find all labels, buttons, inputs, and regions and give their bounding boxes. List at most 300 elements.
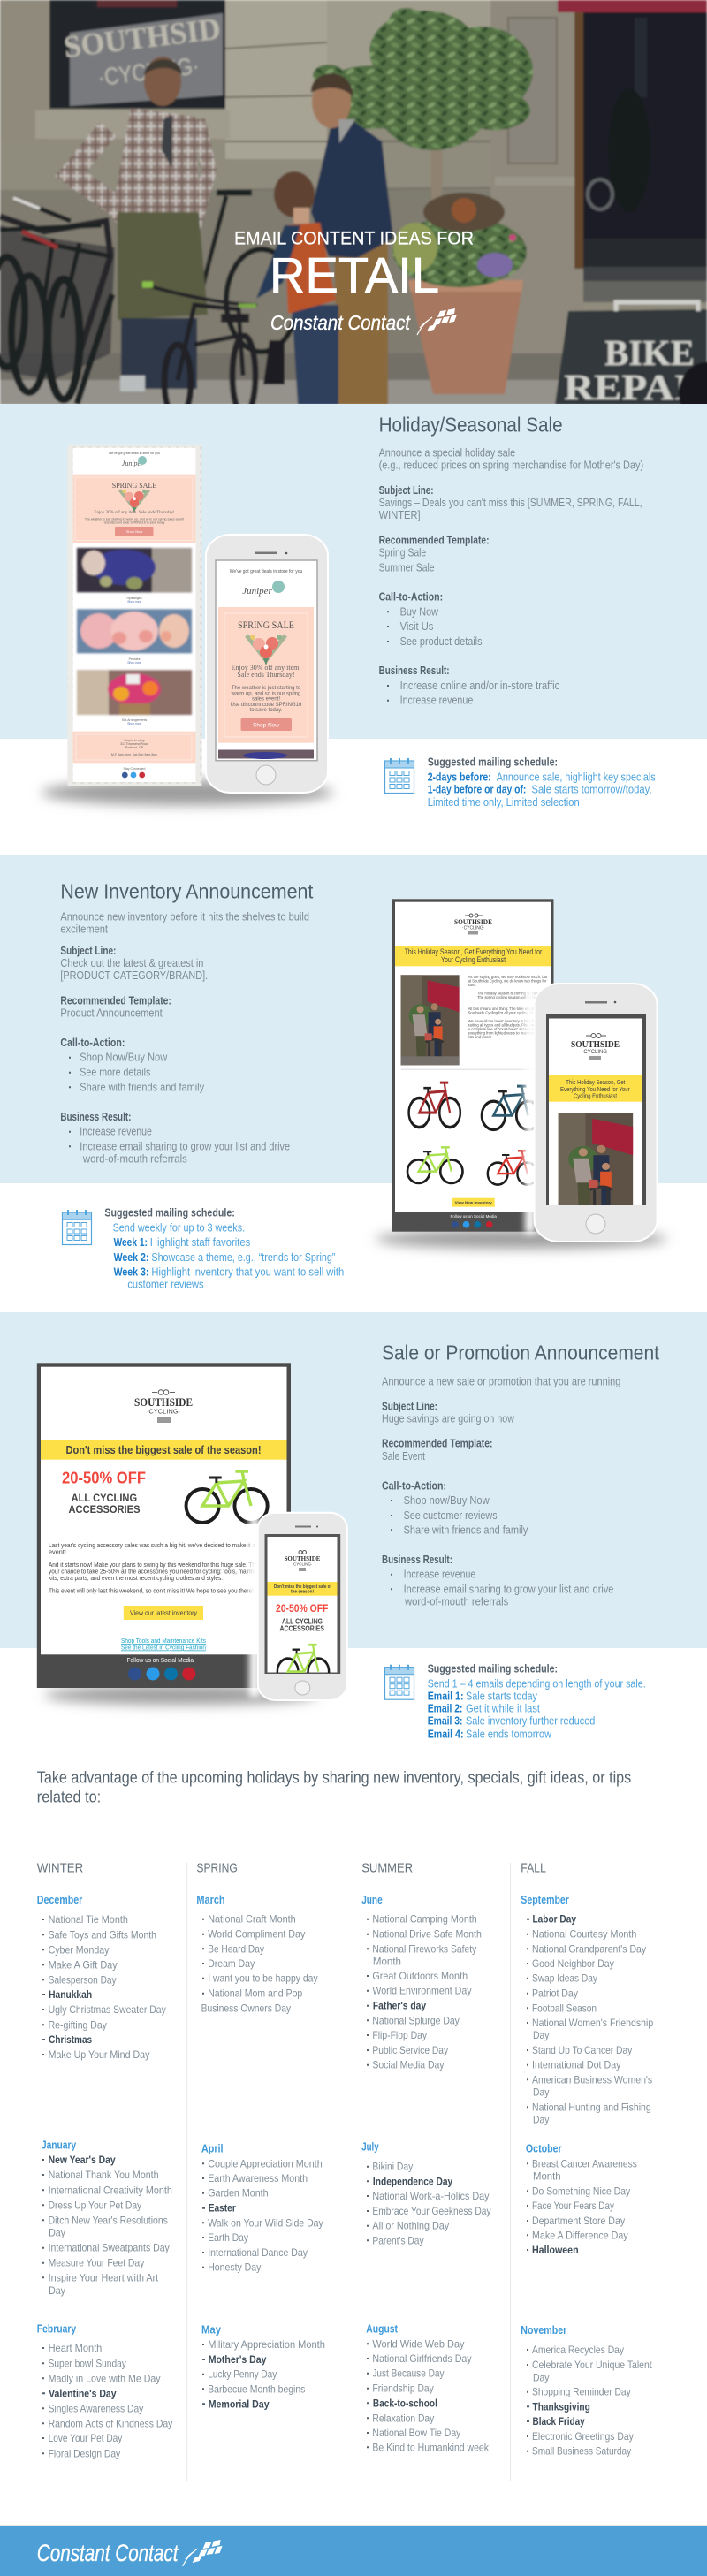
- email mockup: spring sale: 313 Townsend Road: [120, 742, 148, 746]
- boy in orange shirt: [256, 171, 338, 405]
- month list: february: Love Your Pet Day: [49, 2432, 122, 2444]
- email mockup: spring sale: Shop now: [127, 661, 141, 665]
- month list: december: [37, 1894, 166, 2061]
- email mockup: biggest sale of the season: View our latest inventory: [130, 1608, 197, 1617]
- month list: november: Shopping Reminder Day: [532, 2386, 631, 2398]
- month list: december: December: [37, 1894, 82, 1906]
- email mockup: biggest sale of the season: And it starts now! Make your plans to swing by this weekend for this huge sale. Th: [49, 1561, 255, 1569]
- month list: february: Valentine's Day: [49, 2387, 117, 2399]
- mailing schedule: inventory: Highlight inventory that you want to sell with: [151, 1266, 344, 1279]
- panel: sale or promotion announcement: [0, 1312, 707, 1741]
- mailing schedule: holiday sale: Limited time only, Limited selection: [428, 796, 580, 809]
- text block: holiday sale details: Announce a special holiday sale: [379, 447, 515, 460]
- text block: inventory details: Increase revenue: [80, 1126, 152, 1138]
- month list: august: World Wide Web Day: [372, 2337, 465, 2350]
- hero overline title: EMAIL CONTENT IDEAS FOR: [234, 228, 474, 249]
- month list: june: National Splurge Day: [372, 2014, 460, 2026]
- email mockup: biggest sale of the season: ·CYCLING·: [147, 1407, 180, 1416]
- email mockup: spring sale: Shop now: [127, 722, 141, 726]
- month list: july: National Work-a-Holics Day: [372, 2190, 490, 2202]
- month list: november: Celebrate Your Unique Talent: [532, 2359, 652, 2371]
- email mockup: southside cycling inventory: Your Cycling Enthusiast: [441, 955, 506, 964]
- text block: holiday sale details: Buy Now: [400, 605, 439, 618]
- text block: inventory details: [PRODUCT CATEGORY/BRAND].: [60, 969, 208, 982]
- text block: holiday sale details: Increase revenue: [400, 695, 473, 707]
- hero constant contact logo: Constant Contact: [270, 311, 411, 334]
- month list: april: Garden Month: [208, 2187, 269, 2200]
- email mockup: southside cycling inventory: a complete line of "must-have" accessories: [468, 1027, 538, 1031]
- text block: promotion details: Business Result:: [382, 1554, 452, 1566]
- text block: inventory details: word-of-mouth referrals: [82, 1152, 187, 1165]
- hero main title: RETAIL: [270, 247, 439, 304]
- phone mockup: biggest sale of the season: the season!: [291, 1589, 314, 1594]
- email mockup: biggest sale of the season: your chance to take 25-50% all the accessories you need for cycling: tools, mainte: [49, 1568, 255, 1575]
- month list: june: Month: [373, 1955, 401, 1967]
- email mockup: spring sale: Shop Now: [126, 529, 142, 534]
- phone mockup: spring sale: The weather is just starting to: [232, 686, 301, 691]
- shop doorway: [558, 0, 707, 302]
- month list: december: Salesperson Day: [49, 1973, 117, 1986]
- text block: inventory details: Business Result:: [60, 1111, 131, 1123]
- text block: inventory details: Increase email sharing to grow your list and drive: [80, 1140, 290, 1152]
- footer band with logo: Constant Contact: [37, 2540, 179, 2566]
- month list: june: National Drive Safe Month: [372, 1928, 482, 1941]
- month list: july: All or Nothing Day: [372, 2220, 449, 2232]
- man in navy sweater: [311, 73, 393, 405]
- month list: february: [37, 2322, 172, 2459]
- month list: august: Relaxation Day: [372, 2412, 434, 2424]
- month list: september: Day: [533, 2086, 549, 2098]
- column: winter: [37, 1862, 172, 2459]
- phone mockup: spring sale: Sale ends Thursday!: [237, 671, 295, 679]
- month list: august: [366, 2323, 490, 2453]
- month list: august: Be Kind to Humankind week: [372, 2441, 490, 2453]
- month list: july: Independence Day: [373, 2175, 452, 2187]
- month list: october: Face Your Fears Day: [532, 2200, 614, 2212]
- email mockup: southside cycling inventory: ·CYCLING·: [462, 926, 485, 931]
- month list: january: Inspire Your Heart with Art: [49, 2271, 159, 2283]
- month list: march: Business Owners Day: [201, 2002, 291, 2014]
- column: summer: SUMMER: [361, 1862, 413, 1876]
- month list: september: National Grandparent's Day: [532, 1942, 646, 1955]
- month list: october: Month: [533, 2170, 561, 2183]
- month list: november: Small Business Saturday: [532, 2445, 631, 2458]
- bike repair sign: REPAI: [564, 367, 690, 407]
- month list: january: Dress Up Your Pet Day: [49, 2199, 141, 2211]
- text block: holiday sale details: Visit Us: [400, 620, 433, 633]
- month list: february: Super bowl Sunday: [49, 2357, 126, 2369]
- month list: march: March: [196, 1894, 225, 1906]
- email mockup: spring sale: We've got great deals in store for you: [109, 452, 160, 455]
- text block: holiday sale details: Subject Line:: [379, 484, 434, 497]
- month list: january: Ditch New Year's Resolutions: [49, 2214, 168, 2226]
- text block: inventory details: Announce new inventory before it hits the shelves to build: [60, 910, 309, 923]
- month list: april: Easter: [209, 2202, 236, 2215]
- month list: july: Embrace Your Geekness Day: [372, 2205, 491, 2217]
- email mockup: biggest sale of the season: 20-50% OFF: [62, 1469, 146, 1486]
- mailing schedule: inventory: Highlight staff favorites: [150, 1236, 250, 1249]
- month list: march: World Compliment Day: [208, 1928, 305, 1941]
- month list: april: April: [201, 2142, 223, 2154]
- email mockup: southside cycling inventory: We have all the latest inventory in bicycles: [468, 1019, 537, 1023]
- month list: june: National Camping Month: [372, 1913, 477, 1926]
- text block: holiday sale details: Summer Sale: [379, 561, 435, 574]
- month list: april: [201, 2142, 323, 2274]
- email mockup: biggest sale of the season: ALL CYCLING: [72, 1493, 137, 1504]
- mailing schedule: holiday sale: Announce sale, highlight key specials: [497, 771, 656, 784]
- month list: february: Singles Awareness Day: [49, 2402, 143, 2414]
- email mockup: spring sale: The weather is just starting to warm up, and so is our spring sales event!: [85, 518, 184, 521]
- month list: december: Ugly Christmas Sweater Day: [49, 2003, 166, 2016]
- text block: inventory details: Recommended Template:: [60, 994, 171, 1007]
- email mockup: spring sale: Shop now: [127, 600, 141, 604]
- month list: april: Earth Awareness Month: [208, 2172, 308, 2185]
- mailing schedule: promotion: Email 4:: [428, 1729, 463, 1741]
- email mockup: spring sale: Stop in to shop: [124, 739, 145, 742]
- month list: january: Day: [49, 2227, 65, 2239]
- text block: promotion details: Sale Event: [382, 1450, 425, 1463]
- email mockup: southside cycling inventory: at Southside Cycling, we do know two things for: [468, 979, 547, 983]
- month list: february: Floral Design Day: [49, 2447, 120, 2459]
- boy's bicycle: [142, 285, 285, 419]
- phone mockup: spring sale: Juniper: [242, 586, 273, 597]
- text block: promotion details: Subject Line:: [382, 1400, 437, 1412]
- intro text: upcoming holidays: [37, 1767, 631, 1806]
- phone mockup: biggest sale of the season: ·CYCLING·: [292, 1562, 313, 1566]
- month list: february: Random Acts of Kindness Day: [49, 2417, 172, 2429]
- mailing schedule: inventory: Week 3:: [114, 1266, 148, 1279]
- email mockup: southside cycling inventory: This Holiday Season, Get Everything You Need for: [405, 947, 542, 956]
- month list: december: Safe Toys and Gifts Month: [49, 1928, 156, 1941]
- phone mockup: southside cycling inventory: [525, 984, 658, 1242]
- mailing schedule: holiday sale: 1-day before or day of:: [428, 784, 526, 796]
- month list: december: Make Up Your Mind Day: [49, 2048, 149, 2061]
- mailing schedule: promotion: Get it while it last: [466, 1702, 540, 1714]
- text block: inventory details: Product Announcement: [60, 1007, 163, 1020]
- heading: sale or promotion announcement: Sale or Promotion Announcement: [382, 1341, 660, 1364]
- email mockup: southside cycling inventory: The spring cycling season will be here: [477, 995, 540, 999]
- phone mockup: southside cycling inventory: This Holiday Season, Get: [566, 1078, 626, 1086]
- month list: march: I want you to be happy day: [208, 1972, 318, 1985]
- email mockup: southside cycling inventory: suiting all types and all budgets. Plus, we: [468, 1023, 536, 1027]
- email mockup: southside cycling inventory: The holiday season is coming up fast: [477, 992, 539, 995]
- mailing schedule: inventory: Send weekly for up to 3 weeks.: [113, 1221, 245, 1234]
- month list: december: Cyber Monday: [49, 1943, 110, 1956]
- month list: august: August: [366, 2323, 399, 2336]
- month list: october: [526, 2142, 637, 2256]
- email mockup: biggest sale of the season: event!: [49, 1548, 66, 1555]
- month list: march: Dream Day: [208, 1957, 255, 1970]
- month list: august: Back-to-school: [373, 2397, 437, 2409]
- month list: december: Christmas: [49, 2033, 92, 2046]
- email mockup: biggest sale of the season: See the Latest in Cycling Fashion: [121, 1644, 206, 1651]
- phone mockup: biggest sale of the season: ACCESSORIES: [279, 1624, 325, 1633]
- email mockup: spring sale: M-F 9am-9pm, Sat-Sun 9am-5pm: [111, 753, 157, 756]
- text block: holiday sale details: Savings – Deals you can't miss this [SUMMER, SPRING, FALL,: [379, 497, 642, 509]
- mailing schedule: promotion: Send 1 – 4 emails depending on length of your sale.: [428, 1677, 646, 1690]
- email mockup: spring sale: Peonies: [129, 657, 141, 661]
- phone mockup: spring sale: SPRING SALE: [238, 619, 294, 631]
- text block: inventory details: See more details: [80, 1067, 150, 1079]
- month list: march: National Mom and Pop: [208, 1987, 303, 2000]
- email mockup: southside cycling inventory: everything from lighted vests to maintenance: [468, 1030, 542, 1036]
- text block: promotion details: word-of-mouth referrals: [404, 1595, 508, 1607]
- shop window with sign: [49, 0, 225, 109]
- email mockup: biggest sale of the season: Last year's cycling accessory sales was such a big hit, we've decided to make it a: [49, 1541, 256, 1549]
- mailing schedule: holiday sale: 2-days before:: [428, 771, 491, 784]
- text block: holiday sale details: Recommended Template:: [379, 534, 490, 546]
- month list: september: National Hunting and Fishing: [532, 2101, 651, 2113]
- month list: september: National Women's Friendship: [532, 2017, 653, 2029]
- email mockup: spring sale: SPRING SALE: [112, 482, 156, 490]
- month list: february: Madly in Love with Me Day: [49, 2372, 161, 2384]
- text block: inventory details: Share with friends and family: [80, 1081, 205, 1093]
- month list: september: Day: [533, 2029, 549, 2041]
- month list: may: Memorial Day: [209, 2397, 270, 2410]
- mailing schedule: promotion: Sale starts today: [466, 1690, 538, 1702]
- month list: september: Football Season: [532, 2002, 597, 2014]
- phone mockup: spring sale: to save today.: [250, 708, 283, 713]
- month list: july: Bikini Day: [372, 2161, 413, 2173]
- mailing schedule: inventory: Showcase a theme, e.g., “trends for Spring”: [151, 1251, 335, 1264]
- month list: may: Military Appreciation Month: [208, 2338, 325, 2351]
- email mockup: biggest sale of the season: Shop Tools and Maintenance Kits: [121, 1637, 206, 1645]
- month list: june: June: [361, 1894, 383, 1906]
- month list: april: Couple Appreciation Month: [208, 2157, 323, 2169]
- month list: may: Mother's Day: [209, 2353, 267, 2366]
- mailing schedule: inventory: Week 1:: [114, 1236, 148, 1249]
- month list: june: Great Outdoors Month: [372, 1970, 468, 1982]
- month list: june: [361, 1894, 482, 2071]
- panel: holiday lists by season: [37, 1862, 653, 2459]
- text block: promotion details: Increase email sharing to grow your list and drive: [404, 1583, 613, 1595]
- email mockup: biggest sale of the season: This event will only last this weekend, so don't miss it! We hope to see you there!: [49, 1587, 254, 1594]
- month list: may: [201, 2323, 325, 2410]
- text block: holiday sale details: Increase online and/or in-store traffic: [400, 680, 559, 692]
- mailing schedule: promotion: Suggested mailing schedule:: [428, 1663, 558, 1676]
- phone mockup: biggest sale of the season: Don't miss the biggest sale of: [274, 1584, 331, 1590]
- month list: february: Heart Month: [49, 2342, 102, 2354]
- month list: november: November: [521, 2324, 566, 2337]
- month list: september: National Courtesy Month: [532, 1928, 636, 1941]
- text block: inventory details: Shop Now/Buy Now: [80, 1052, 168, 1064]
- month list: july: July: [361, 2141, 379, 2154]
- month list: november: [521, 2324, 652, 2458]
- month list: august: National Bow Tie Day: [372, 2427, 460, 2439]
- potted tree: [313, 8, 533, 394]
- text block: holiday sale details: See product details: [400, 635, 483, 648]
- month list: december: Make A Gift Day: [49, 1958, 118, 1971]
- month list: november: Thanksgiving: [532, 2400, 590, 2413]
- month list: december: National Tie Month: [49, 1913, 128, 1926]
- column: winter: WINTER: [37, 1862, 83, 1876]
- text block: promotion details: Announce a new sale or promotion that you are running: [382, 1375, 620, 1387]
- email mockup: biggest sale of the season: Don't miss the biggest sale of the season!: [65, 1443, 262, 1456]
- mailing schedule: inventory: [104, 1207, 344, 1291]
- column: spring: SPRING: [196, 1862, 238, 1876]
- hero photo of bike shop staff and customers: [0, 0, 707, 424]
- month list: april: International Dance Day: [208, 2246, 308, 2259]
- heading: holiday/seasonal sale: Holiday/Seasonal Sale: [379, 413, 563, 436]
- text block: inventory details: Check out the latest & greatest in: [60, 957, 203, 969]
- month list: january: Measure Your Feet Day: [49, 2257, 144, 2269]
- email mockup: biggest sale of the season: ACCESSORIES: [69, 1505, 141, 1516]
- month list: june: Social Media Day: [372, 2059, 444, 2071]
- icon: calendar: [385, 1665, 414, 1699]
- month list: september: International Dot Day: [532, 2059, 620, 2071]
- text block: promotion details: Increase revenue: [404, 1569, 475, 1581]
- text block: inventory details: [60, 910, 309, 1165]
- text block: holiday sale details: WINTER]: [379, 509, 421, 521]
- month list: july: [361, 2141, 491, 2246]
- text block: holiday sale details: [379, 447, 643, 707]
- month list: october: Halloween: [532, 2244, 579, 2256]
- email mockup: southside cycling inventory: kits and more!: [468, 1035, 491, 1039]
- month list: july: Parent's Day: [372, 2234, 424, 2246]
- mailing schedule: inventory: Suggested mailing schedule:: [104, 1207, 235, 1220]
- email mockup: southside cycling inventory: sure:: [468, 983, 476, 987]
- panel: new inventory announcement: [0, 855, 707, 1291]
- month list: january: [42, 2139, 172, 2297]
- mailing schedule: promotion: Email 3:: [428, 1715, 463, 1728]
- text block: promotion details: Huge savings are going on now: [382, 1413, 515, 1425]
- month list: september: Stand Up To Cancer Day: [532, 2044, 632, 2056]
- mailing schedule: promotion: Email 2:: [428, 1702, 463, 1714]
- text block: inventory details: Subject Line:: [60, 945, 116, 957]
- email mockup: spring sale: Silk Arrangements: [122, 718, 147, 722]
- text block: holiday sale details: Business Result:: [379, 665, 450, 677]
- man in plaid shirt with apron: [71, 57, 209, 391]
- month list: november: America Recycles Day: [532, 2344, 624, 2356]
- month list: september: Patriot Day: [532, 1987, 578, 2000]
- month list: january: January: [42, 2139, 76, 2151]
- email mockup: biggest sale of the season: Follow us on Social Media: [127, 1656, 194, 1664]
- phone mockup: spring sale: [206, 535, 328, 793]
- email mockup: southside cycling inventory: SOUTHSIDE: [454, 917, 492, 926]
- email mockup: southside cycling inventory: All this means one thing: The time is right: [468, 1007, 536, 1011]
- column: fall: [521, 1862, 653, 2458]
- phone mockup: spring sale: Shop Now: [253, 723, 279, 728]
- panel: holiday seasonal sale: [0, 404, 707, 809]
- mailing schedule: promotion: Sale inventory further reduced: [466, 1715, 595, 1728]
- bike repair sign: [555, 302, 707, 424]
- month list: december: Hanukkah: [49, 1988, 92, 2001]
- shop window with sign: ·CYCLING·: [96, 52, 201, 91]
- phone mockup: southside cycling inventory: Everything You Need for Your: [560, 1085, 630, 1093]
- email mockup: spring sale: Use discount code SPRING16 to save today: [104, 521, 165, 525]
- month list: march: Be Heard Day: [208, 1942, 264, 1955]
- month list: may: Lucky Penny Day: [208, 2368, 277, 2381]
- icon: calendar: [385, 758, 414, 794]
- text block: inventory details: Call-to-Action:: [60, 1037, 125, 1049]
- mailing schedule: holiday sale: Suggested mailing schedule:: [428, 756, 558, 769]
- month list: february: February: [37, 2322, 76, 2335]
- month list: september: September: [521, 1894, 569, 1906]
- month list: september: American Business Women's: [532, 2073, 652, 2086]
- phone mockup: spring sale: warm up, and so is our spring: [231, 691, 300, 696]
- month list: september: Good Neighbor Day: [532, 1957, 614, 1970]
- bicycles rack: [0, 193, 297, 404]
- month list: november: Day: [533, 2371, 549, 2383]
- email mockup: southside cycling inventory: Follow us on Social Media: [451, 1214, 497, 1219]
- email mockup: southside cycling inventory: As the saying goes, we may not know much, but: [468, 975, 548, 979]
- month list: august: National Girlfriends Day: [372, 2352, 472, 2365]
- email mockup: biggest sale of the season: kits, extra parts, and even the most recent cycling clothes and styles.: [49, 1574, 223, 1582]
- month list: october: Do Something Nice Day: [532, 2185, 630, 2197]
- month list: december: Re-gifting Day: [49, 2018, 107, 2031]
- mailing schedule: holiday sale: [428, 756, 656, 809]
- phone mockup: southside cycling inventory: ·CYCLING·: [582, 1050, 609, 1055]
- month list: october: Breast Cancer Awareness: [532, 2157, 637, 2169]
- shop window with sign: SOUTHSID: [62, 11, 223, 65]
- column: spring: [196, 1862, 325, 2410]
- email mockup: spring sale: Enjoy 30% off any item. Sale ends Thursday!: [94, 511, 175, 515]
- mailing schedule: promotion: [428, 1663, 646, 1741]
- month list: september: Swap Ideas Day: [532, 1972, 597, 1985]
- text block: holiday sale details: Call-to-Action:: [379, 591, 443, 604]
- icon: calendar: [62, 1210, 92, 1244]
- month list: april: Walk on Your Wild Side Day: [208, 2216, 323, 2229]
- email mockup: spring sale: Stay Connected: [124, 767, 146, 771]
- phone mockup: southside cycling inventory: Cycling Enthusiast: [574, 1092, 618, 1099]
- month list: june: Flip-Flop Day: [372, 2029, 427, 2041]
- month list: january: Day: [49, 2284, 65, 2297]
- email mockup: southside cycling inventory: Southside Cycling for all your cycling needs: [468, 1011, 539, 1014]
- email mockup: southside cycling inventory: View New Inventory: [455, 1200, 492, 1205]
- month list: january: New Year's Day: [49, 2154, 116, 2166]
- text block: promotion details: Call-to-Action:: [382, 1479, 446, 1492]
- email mockup: biggest sale of the season: SOUTHSIDE: [134, 1396, 193, 1409]
- month list: august: Just Because Day: [372, 2367, 444, 2380]
- month list: may: Barbecue Month begins: [208, 2382, 305, 2395]
- mailing schedule: inventory: Week 2:: [114, 1251, 148, 1264]
- phone mockup: spring sale: Enjoy 30% off any item.: [232, 664, 300, 672]
- month list: january: International Creativity Month: [49, 2184, 172, 2196]
- intro text: upcoming holidays: related to:: [37, 1787, 101, 1806]
- phone mockup: spring sale: We've got great deals in store for you: [230, 569, 303, 574]
- month list: june: World Environment Day: [372, 1985, 472, 1997]
- phone mockup: spring sale: Use discount code SPRING16: [231, 703, 302, 708]
- text block: promotion details: Recommended Template:: [382, 1438, 493, 1450]
- text block: promotion details: Share with friends and family: [404, 1524, 528, 1536]
- month list: september: Labor Day: [532, 1913, 576, 1926]
- month list: january: National Thank You Month: [49, 2169, 159, 2181]
- month list: september: Day: [533, 2113, 549, 2125]
- mailing schedule: inventory: customer reviews: [127, 1279, 204, 1291]
- heading: new inventory announcement: New Inventory Announcement: [60, 880, 314, 903]
- month list: august: Friendship Day: [372, 2382, 434, 2395]
- email mockup: southside cycling inventory: [376, 899, 667, 1249]
- month list: april: Honesty Day: [208, 2261, 261, 2274]
- phone mockup: biggest sale of the season: 20-50% OFF: [276, 1602, 328, 1615]
- text block: promotion details: [382, 1375, 620, 1607]
- column: fall: FALL: [521, 1862, 546, 1876]
- month list: november: Electronic Greetings Day: [532, 2430, 634, 2443]
- month list: march: National Craft Month: [208, 1913, 296, 1926]
- email mockup: spring sale: Juniper: [122, 460, 144, 467]
- column: summer: [361, 1862, 491, 2453]
- email mockup: spring sale: Portland, OR: [125, 746, 144, 749]
- phone mockup: biggest sale of the season: SOUTHSIDE: [285, 1554, 321, 1562]
- text block: promotion details: Shop now/Buy Now: [404, 1494, 490, 1507]
- text block: inventory details: excitement: [60, 923, 108, 936]
- text block: holiday sale details: Spring Sale: [379, 547, 426, 559]
- mailing schedule: promotion: Email 1:: [428, 1690, 463, 1702]
- month list: june: Father's day: [373, 2000, 426, 2012]
- bike repair sign: BIKE: [604, 332, 695, 373]
- hero banner: [0, 0, 707, 424]
- month list: october: October: [526, 2142, 562, 2154]
